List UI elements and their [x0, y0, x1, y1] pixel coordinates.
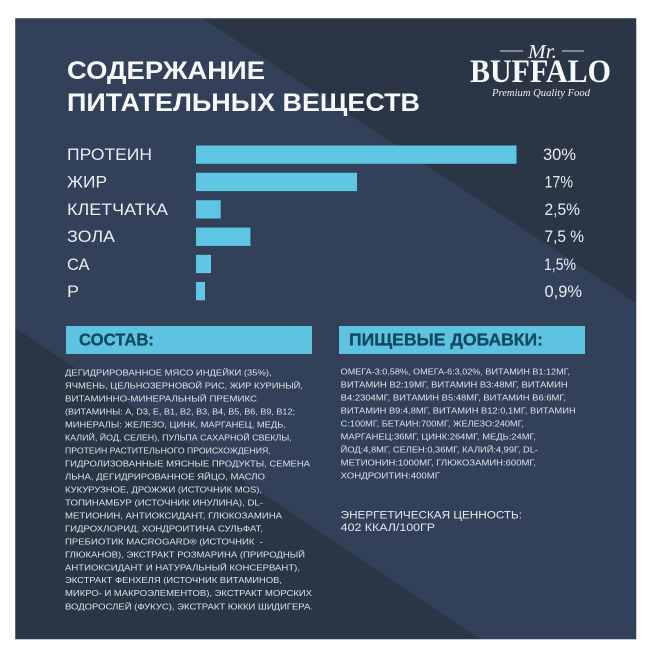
text block: composition: (ВИТАМИНЫ: А, D3, Е, В1, В2, В3, В4, В5, В6, В9, В12; — [65, 407, 295, 417]
text block: composition: ТОПИНАМБУР (ИСТОЧНИК ИНУЛИНА), DL- — [65, 497, 263, 507]
text block: composition: КАЛИЙ, ЙОД, СЕЛЕН), ПУЛЬПА САХАРНОЙ СВЕКЛЫ, — [65, 432, 292, 442]
logo: Mr. Buffalo: Premium Quality Food — [491, 88, 591, 99]
title: ПИТАТЕЛЬНЫХ ВЕЩЕСТВ — [67, 89, 420, 117]
text block: composition: МИНЕРАЛЫ: ЖЕЛЕЗО, ЦИНК, МАРГАНЕЦ, МЕДЬ, — [65, 420, 286, 430]
text block: energy value: ЭНЕРГЕТИЧЕСКАЯ ЦЕННОСТЬ: — [341, 509, 522, 521]
text block: composition: ПРОТЕИН РАСТИТЕЛЬНОГО ПРОИСХОЖДЕНИЯ, — [65, 446, 271, 456]
text block: composition: ГИДРОЛИЗОВАННЫЕ МЯСНЫЕ ПРОДУКТЫ, СЕМЕНА — [65, 458, 310, 468]
row: phosphorus: Р — [67, 282, 79, 301]
row: fiber: 2,5% — [544, 201, 580, 219]
row: fiber — [67, 200, 580, 219]
heading: composition — [66, 326, 312, 354]
title: СОДЕРЖАНИЕ — [67, 57, 265, 85]
title — [67, 57, 420, 117]
text block: additives — [341, 366, 576, 481]
text block: composition: МИКРО- И МАКРОЭЛЕМЕНТОВ), ЭКСТРАКТ МОРСКИХ — [65, 588, 312, 598]
text block: additives: ХОНДРОИТИН:400МГ — [341, 471, 440, 481]
text block: composition: ВИТАМИННО-МИНЕРАЛЬНЫЙ ПРЕМИКС — [65, 393, 257, 404]
bar chart: nutrients — [67, 145, 584, 301]
text block: composition: ДЕГИДРИРОВАННОЕ МЯСО ИНДЕЙКИ (35%), — [65, 367, 272, 378]
row: phosphorus — [67, 282, 582, 301]
row: protein: 30% — [543, 146, 576, 164]
text block: composition: МЕТИОНИН, АНТИОКСИДАНТ, ГЛЮКОЗАМИНА — [65, 510, 282, 520]
text block: composition: ВОДОРОСЛЕЙ (ФУКУС), ЭКСТРАКТ ЮККИ ШИДИГЕРА. — [65, 600, 313, 611]
heading: food additives — [339, 326, 585, 354]
text block: additives: C:100МГ, БЕТАИН:700МГ, ЖЕЛЕЗО:240МГ, — [341, 418, 524, 428]
heading: food additives: ПИЩЕВЫЕ ДОБАВКИ: — [349, 330, 543, 350]
text block: composition: АНТИОКСИДАНТ И НАТУРАЛЬНЫЙ КОНСЕРВАНТ), — [65, 561, 300, 572]
text block: composition — [65, 367, 313, 611]
heading: composition: СОСТАВ: — [79, 330, 154, 350]
text block: additives: ВИТАМИН В2:19МГ, ВИТАМИН В3:48МГ, ВИТАМИН — [341, 379, 568, 389]
text block: additives: ЙОД:4,8МГ, СЕЛЕН:0,36МГ, КАЛИЙ:4,99Г, DL- — [341, 444, 538, 455]
row: ash: 7,5 % — [544, 228, 584, 246]
row: fat — [67, 172, 573, 192]
row: protein: ПРОТЕИН — [67, 145, 152, 164]
row: fiber: КЛЕТЧАТКА — [67, 200, 169, 219]
text block: additives: МЕТИОНИН:1000МГ, ГЛЮКОЗАМИН:600МГ, — [341, 458, 536, 468]
text block: composition: ЯЧМЕНЬ, ЦЕЛЬНОЗЕРНОВОЙ РИС, ЖИР КУРИНЫЙ, — [65, 380, 303, 391]
text block: additives: В4:2304МГ, ВИТАМИН В5:48МГ, ВИТАМИН В6:6МГ, — [341, 392, 566, 402]
row: ash: ЗОЛА — [67, 227, 116, 246]
text block: energy value: 402 ККАЛ/100ГР — [341, 522, 435, 534]
text block: composition: ГИДРОХЛОРИД, ХОНДРОИТИНА СУЛЬФАТ, — [65, 523, 263, 533]
text block: composition: ГЛЮКАНОВ), ЭКСТРАКТ РОЗМАРИНА (ПРИРОДНЫЙ — [65, 548, 305, 559]
text block: composition: ЛЬНА, ДЕГИДРИРОВАННОЕ ЯЙЦО, МАСЛО — [65, 470, 265, 482]
row: calcium — [67, 255, 576, 274]
row: ash — [67, 227, 584, 246]
row: calcium: СА — [67, 255, 90, 274]
text block: additives: МАРГАНЕЦ:36МГ, ЦИНК:264МГ, МЕДЬ:24МГ, — [341, 432, 536, 442]
row: fat: 17% — [544, 174, 573, 192]
row: phosphorus: 0,9% — [544, 283, 582, 301]
row: fat: ЖИР — [67, 172, 107, 192]
logo: Mr. Buffalo: Mr. — [527, 41, 557, 63]
text block: composition: КУКУРУЗНОЕ, ДРОЖЖИ (ИСТОЧНИК MOS), — [65, 484, 262, 494]
logo: Mr. Buffalo: BUFFALO — [470, 54, 611, 90]
logo: Mr. Buffalo — [470, 41, 611, 99]
text block: composition: ПРЕБИОТИК MACROGARD® (ИСТОЧНИК - — [65, 536, 263, 546]
text block: additives: ВИТАМИН В9:4,8МГ, ВИТАМИН В12:0,1МГ, ВИТАМИН — [341, 406, 576, 416]
text block: energy value — [341, 509, 522, 534]
row: calcium: 1,5% — [544, 256, 576, 274]
row: protein — [67, 145, 576, 164]
text block: composition: ЭКСТРАКТ ФЕНХЕЛЯ (ИСТОЧНИК ВИТАМИНОВ, — [65, 575, 282, 585]
text block: additives: ОМЕГА-3:0,58%, ОМЕГА-6:3,02%, ВИТАМИН В1:12МГ, — [341, 366, 570, 376]
